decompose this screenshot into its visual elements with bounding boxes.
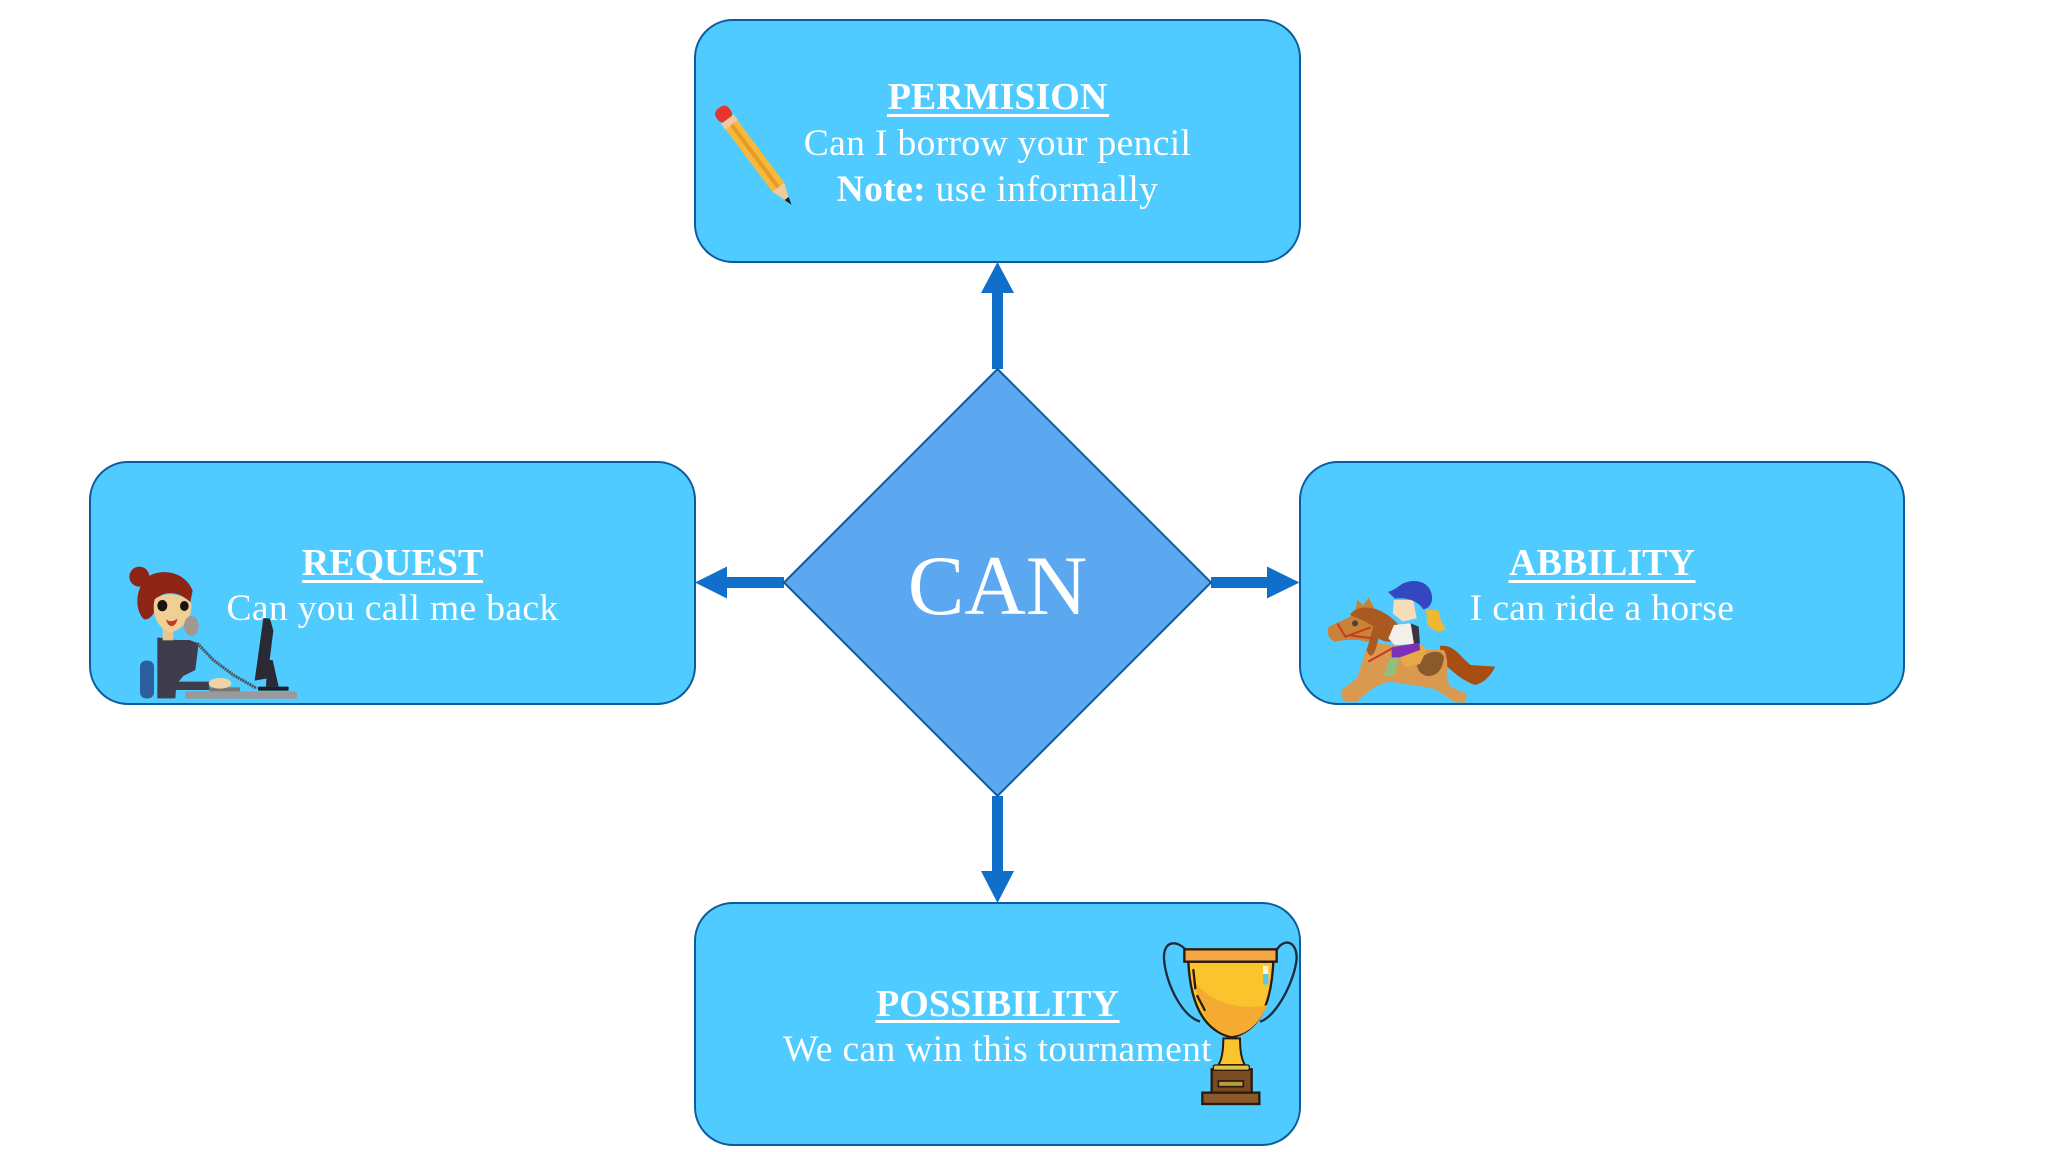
text: possibility example: We can win this tournament	[783, 1029, 1212, 1070]
panel: possibility	[695, 903, 1300, 1145]
text: request example: Can you call me back	[227, 588, 558, 629]
panel: ability	[1300, 462, 1904, 704]
heading: ability: ABBILITY	[1509, 542, 1695, 584]
arrow: right to ability	[1211, 566, 1300, 598]
heading: permission: PERMISION	[888, 76, 1107, 118]
text: permission example: Can I borrow your pencil	[804, 123, 1191, 164]
arrow: up to permission	[981, 262, 1014, 369]
title: CAN: CAN	[908, 539, 1087, 633]
central diamond: CAN	[784, 369, 1211, 796]
icon: gold trophy	[1164, 943, 1297, 1104]
heading: request: REQUEST	[302, 542, 483, 584]
text: ability example: I can ride a horse	[1470, 588, 1734, 629]
icon: pencil	[713, 103, 798, 210]
arrow: left to request	[695, 566, 784, 598]
icon: child riding a horse	[1328, 581, 1495, 703]
arrow: down to possibility	[981, 796, 1014, 903]
icon: woman on the telephone	[129, 567, 297, 699]
heading: possibility: POSSIBILITY	[876, 983, 1119, 1025]
text: permission note: Note: use informally	[837, 169, 1158, 210]
panel: request	[90, 462, 695, 704]
panel: permission	[695, 20, 1300, 262]
